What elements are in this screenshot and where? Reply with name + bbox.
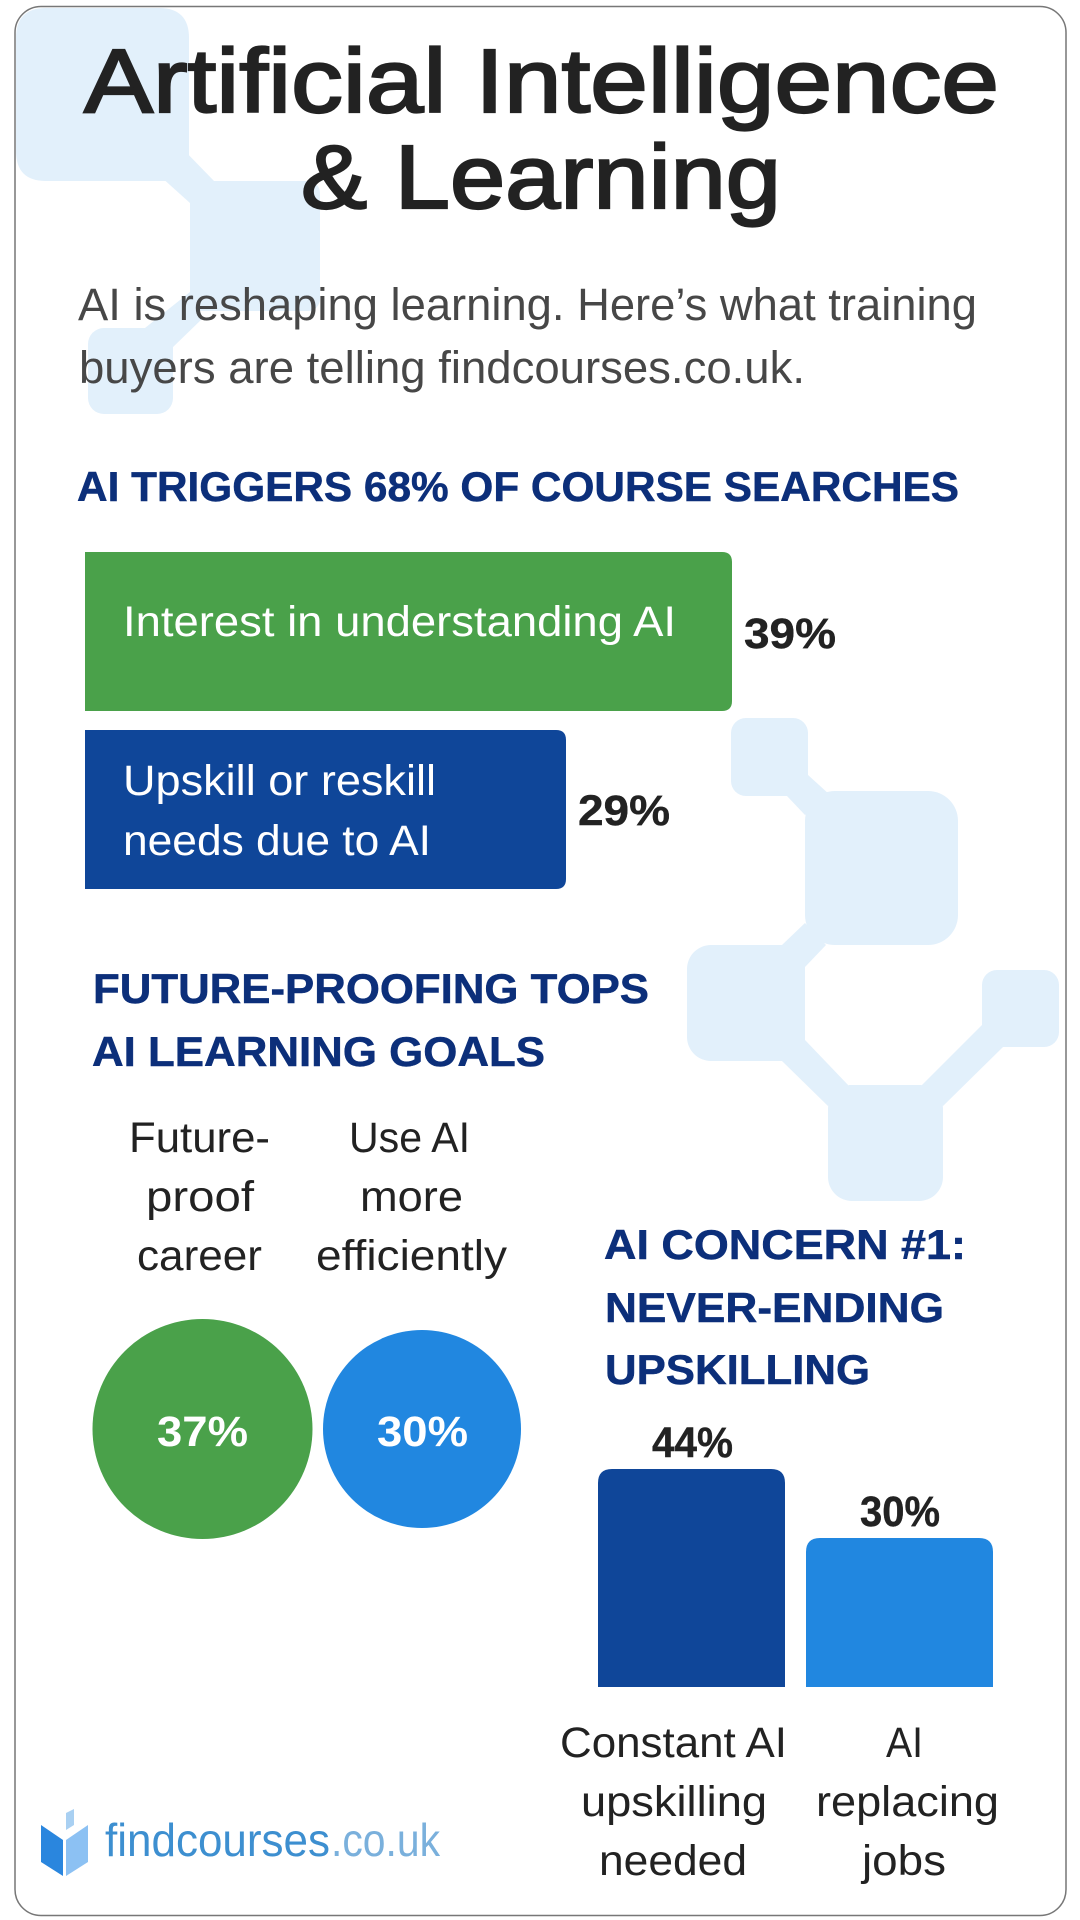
title: Artificial Intelligence bbox=[84, 32, 999, 132]
column: constant AI upskilling: 44% bbox=[652, 1419, 733, 1467]
column: constant AI upskilling: Constant AI bbox=[560, 1719, 787, 1767]
icon: open book bbox=[41, 1809, 88, 1876]
circle stat: future-proof career: 37% bbox=[157, 1408, 248, 1456]
column: AI replacing jobs: replacing bbox=[816, 1778, 999, 1826]
bar: upskill or reskill: 29% bbox=[578, 787, 670, 835]
heading: future-proofing bbox=[92, 965, 649, 1075]
logo wordmark: .co.uk bbox=[331, 1814, 441, 1866]
circle stat: use AI more efficiently: more bbox=[360, 1173, 463, 1221]
subtitle: AI is reshaping learning. Here’s what training bbox=[78, 279, 977, 330]
title: & Learning bbox=[301, 128, 781, 228]
circle stat: use AI more efficiently: efficiently bbox=[316, 1232, 508, 1280]
heading: AI concern: AI CONCERN #1: bbox=[604, 1221, 966, 1268]
circle stat: use AI more efficiently: Use AI bbox=[349, 1114, 470, 1162]
heading: AI concern: NEVER-ENDING bbox=[605, 1284, 944, 1331]
bar chart: course search triggers bbox=[85, 552, 836, 889]
logo wordmark: findcourses bbox=[105, 1814, 330, 1866]
heading: AI concern bbox=[604, 1221, 966, 1393]
circle stat: future-proof career: career bbox=[137, 1232, 262, 1280]
heading: future-proofing: FUTURE-PROOFING TOPS bbox=[93, 965, 649, 1012]
decorative network shape: right bbox=[687, 718, 1059, 1201]
bar: interest in understanding AI bbox=[85, 552, 836, 711]
column: AI replacing jobs bbox=[806, 1488, 999, 1885]
bar: upskill or reskill: needs due to AI bbox=[123, 817, 431, 865]
column: constant AI upskilling: upskilling bbox=[581, 1778, 767, 1826]
heading: AI triggers: AI TRIGGERS 68% OF COURSE SEARCHES bbox=[77, 463, 959, 510]
subtitle: buyers are telling findcourses.co.uk. bbox=[79, 342, 805, 393]
heading: AI concern: UPSKILLING bbox=[605, 1346, 870, 1393]
subtitle bbox=[78, 279, 977, 393]
bar: upskill or reskill: Upskill or reskill bbox=[123, 757, 436, 805]
column chart: AI concerns bbox=[560, 1419, 999, 1885]
circle stat: future-proof career: Future- bbox=[129, 1114, 270, 1162]
circle stat: future-proof career: proof bbox=[146, 1173, 255, 1221]
circle stat: use AI more efficiently: 30% bbox=[377, 1408, 468, 1456]
decorative network shape: top left bbox=[16, 8, 320, 414]
column: AI replacing jobs: jobs bbox=[860, 1837, 946, 1885]
column: constant AI upskilling: needed bbox=[599, 1837, 747, 1885]
heading: future-proofing: AI LEARNING GOALS bbox=[92, 1028, 545, 1075]
bar: interest in understanding AI: Interest in understanding AI bbox=[123, 598, 676, 646]
circle stat: use AI more efficiently bbox=[316, 1114, 521, 1528]
column: AI replacing jobs: AI bbox=[886, 1719, 923, 1767]
bar: upskill or reskill bbox=[85, 730, 670, 889]
column: AI replacing jobs: 30% bbox=[860, 1488, 940, 1536]
logo: findcourses.co.uk bbox=[41, 1809, 441, 1876]
title bbox=[84, 32, 999, 228]
bar: interest in understanding AI: 39% bbox=[744, 610, 836, 658]
column: constant AI upskilling bbox=[560, 1419, 787, 1885]
circle stat: future-proof career bbox=[92, 1114, 312, 1539]
